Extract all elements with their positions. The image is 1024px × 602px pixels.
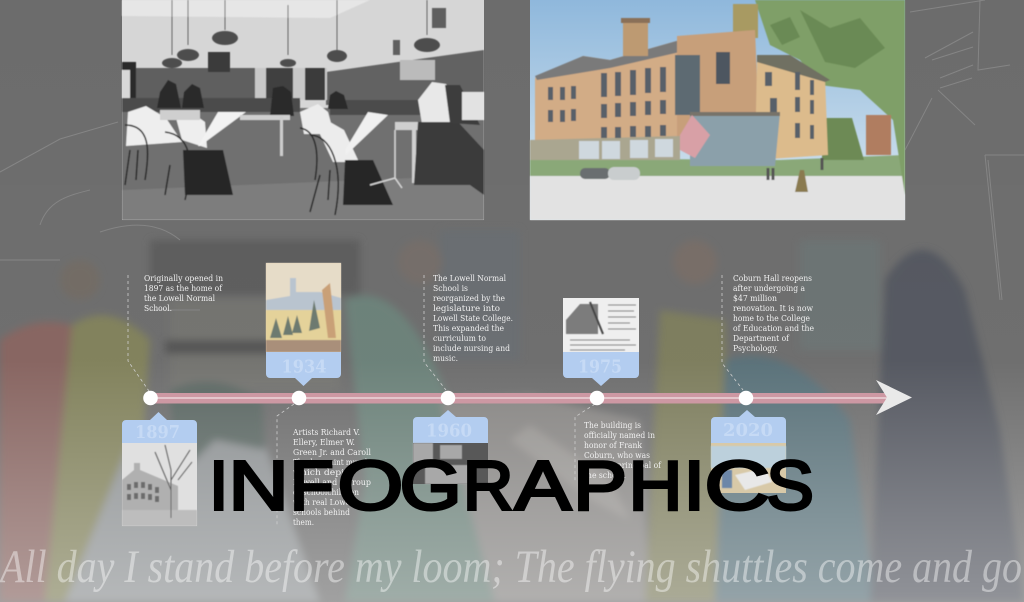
- main title: [209, 446, 814, 525]
- event 1960 text: music.: [433, 353, 458, 363]
- event 1960 text: School is: [433, 283, 468, 293]
- main title: P: [573, 447, 627, 525]
- event 1934 text: Lowell and a group: [293, 477, 371, 487]
- event 1897 text: [144, 273, 224, 313]
- event 1960 badge and photo: [413, 410, 488, 484]
- event 1934 text: Ellery, Elmer W.: [293, 437, 355, 447]
- arrowhead: [876, 380, 912, 415]
- main title: R: [463, 446, 513, 524]
- event 2020 badge and photo: [711, 410, 786, 493]
- event 1934 text: Green Jr. and Caroll: [293, 447, 371, 457]
- event 2020 text: after undergoing a: [733, 283, 805, 293]
- photo: Coburn Hall architectural rendering: [530, 0, 905, 220]
- main title: C: [704, 447, 770, 525]
- main title: I: [209, 446, 228, 524]
- event 2020 text: [733, 273, 814, 353]
- event 1934 text: Thurber paint murals: [293, 457, 371, 467]
- event 2020 text: of Education and the: [733, 323, 814, 333]
- main title: O: [338, 447, 403, 525]
- event 1975 text: officially named in: [584, 430, 656, 440]
- event 1960 text: curriculum to: [433, 333, 486, 343]
- event 1960 text: legislature into: [433, 303, 500, 313]
- event 2020 text: Coburn Hall reopens: [733, 273, 812, 283]
- timeline axis: [150, 380, 912, 415]
- event 1897 text: Originally opened in: [144, 273, 224, 283]
- event 1960 text: include nursing and: [433, 343, 510, 353]
- event 1934 text: them.: [293, 517, 314, 527]
- timeline nodes: [143, 391, 753, 405]
- event 2020 text: Psychology.: [733, 343, 778, 353]
- event 1934 text: with real Lowell: [293, 497, 355, 507]
- event 1975 text: honor of Frank: [584, 440, 643, 450]
- event 1934 text: schools behind: [293, 507, 350, 517]
- event 1975 badge and document photo: [563, 298, 639, 386]
- event 1975 text: [584, 420, 662, 480]
- event 1934 text: of schoolchildren: [293, 487, 360, 497]
- event 1975 text: the first principal of: [584, 460, 662, 470]
- event 1934 badge and painting: [266, 263, 341, 386]
- event 1975 text: Coburn, who was: [584, 450, 650, 460]
- event 1934 text: [292, 427, 371, 527]
- main title: H: [629, 448, 682, 525]
- event 2020 text: Department of: [733, 333, 790, 343]
- event 1897 text: the Lowell Normal: [144, 293, 215, 303]
- event 2020 text: $47 million: [733, 293, 778, 303]
- event 1960 text: Lowell State College.: [433, 313, 513, 323]
- event 1897 badge and photo: [122, 412, 197, 526]
- event 1897 text: 1897 as the home of: [144, 283, 223, 293]
- event 1934 text: Artists Richard V.: [292, 427, 360, 437]
- event 2020 text: renovation. It is now: [733, 303, 813, 313]
- main title: F: [290, 447, 334, 525]
- event 2020 text: home to the College: [733, 313, 810, 323]
- photo: art classroom 1890s: [122, 0, 484, 220]
- main title: I: [684, 446, 705, 525]
- main title: A: [515, 447, 571, 525]
- event 1975 text: The building is: [584, 420, 641, 430]
- main title: G: [400, 446, 462, 524]
- event 1960 text: [433, 273, 513, 363]
- event 1934 text: which depict: [293, 467, 354, 477]
- event 1960 text: This expanded the: [433, 323, 504, 333]
- main title: N: [228, 447, 289, 525]
- event 1960 text: The Lowell Normal: [433, 273, 506, 283]
- connector lines: [128, 275, 743, 527]
- main title: S: [766, 446, 814, 524]
- event 1960 text: reorganized by the: [433, 293, 505, 303]
- event 1975 text: the school.: [584, 470, 626, 480]
- event 1975 badge and document photo: 1975: [578, 356, 622, 378]
- event 1897 text: School.: [144, 303, 172, 313]
- event 1897 badge and photo: 1897: [135, 422, 180, 443]
- event 2020 badge and photo: 2020: [723, 420, 773, 441]
- event 1934 badge and painting: 1934: [282, 356, 326, 378]
- event 1960 badge and photo: 1960: [426, 420, 472, 442]
